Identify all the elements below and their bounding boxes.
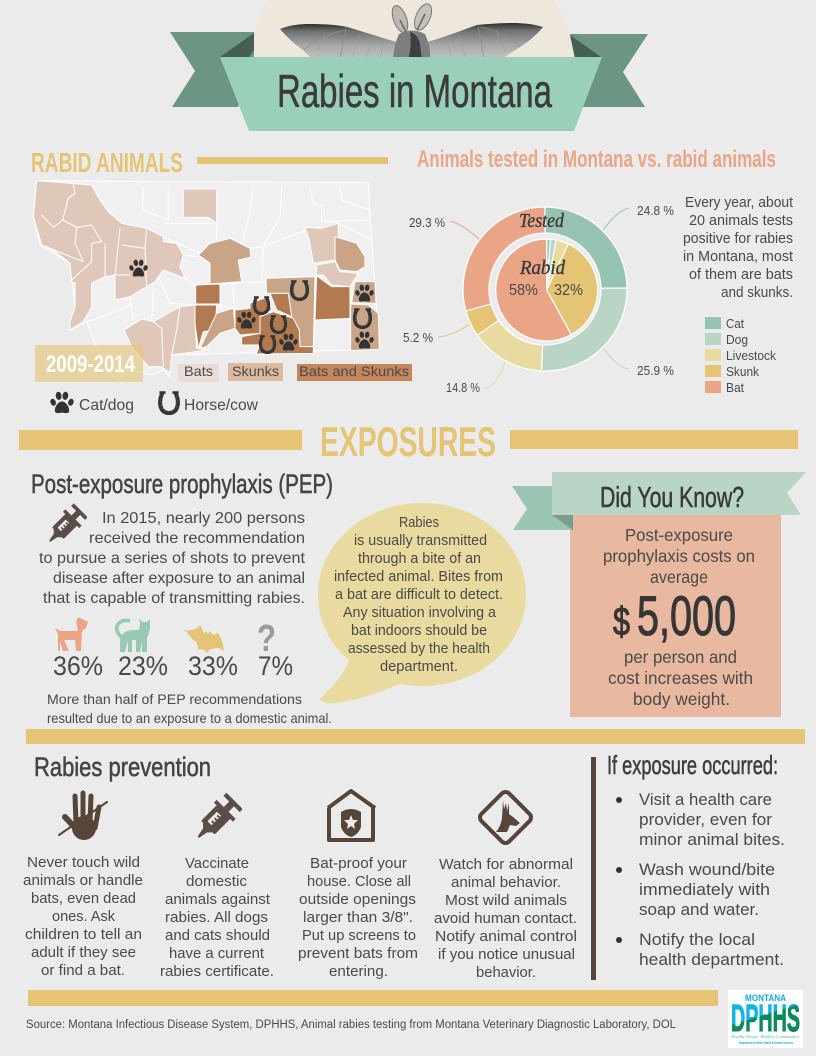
text: cost detail: cost increases with xyxy=(608,668,753,688)
text: domestic animal note: resulted due to an exposure to a domestic animal. xyxy=(47,710,332,726)
text: vaccinate: Vaccinate xyxy=(185,856,249,872)
icon: cat xyxy=(117,619,150,652)
text: every year: Every year, about xyxy=(685,195,793,211)
text: domestic animal note: More than half of PEP recommendations xyxy=(47,691,302,707)
year box xyxy=(35,345,143,382)
text: cost detail: per person and xyxy=(624,647,737,667)
icon: question mark: ? xyxy=(257,618,276,660)
list item: notify: Notify the local xyxy=(639,931,755,949)
chart legend: Livestock xyxy=(726,349,777,363)
text: watch for: Most wild animals xyxy=(445,893,567,909)
icon: bat xyxy=(280,1,543,60)
panel: animals tested vs rabid xyxy=(403,146,793,395)
text: bat-proof: outside openings xyxy=(299,892,416,908)
chart legend: Cat xyxy=(726,317,744,331)
text: vaccinate: rabies. All dogs xyxy=(165,910,268,926)
text: vaccinate: and cats should xyxy=(165,928,270,944)
callout: speech bubble: assessed by the health xyxy=(348,640,490,657)
text: vaccinate: have a current xyxy=(169,946,264,962)
text: never touch: ones. Ask xyxy=(52,909,116,925)
ribbon front xyxy=(220,57,602,131)
leader lines xyxy=(438,208,629,388)
ribbon left fold xyxy=(220,33,254,57)
logo: DPHHS: Department of Public Health & Human Services xyxy=(739,1041,793,1045)
number: cost: 5,000 xyxy=(637,584,736,647)
text: PEP description xyxy=(39,510,306,607)
panel: rabies prevention xyxy=(23,752,577,981)
icon: deer sign xyxy=(478,790,533,845)
icon: hand xyxy=(59,793,107,840)
chart legend: Bat xyxy=(726,381,745,395)
text: watch for: avoid human contact. xyxy=(434,911,577,927)
donut labels: 58% xyxy=(509,282,538,299)
text: cost intro xyxy=(603,525,755,587)
text: bat-proof: prevent bats from xyxy=(298,946,418,962)
section heading: exposures: EXPOSURES xyxy=(320,418,496,465)
text: every year: and skunks. xyxy=(721,285,793,301)
text: every year: positive for rabies xyxy=(683,231,793,247)
heading: Post-exposure prophylaxis (PEP) xyxy=(31,469,333,499)
logo: DPHHS: MONTANA xyxy=(745,993,786,1003)
legend: horse/cow xyxy=(159,392,258,414)
donut labels xyxy=(403,204,674,395)
callout: speech bubble: Rabies xyxy=(399,514,439,531)
donut labels: 25.9 % xyxy=(637,364,674,378)
section heading: exposures xyxy=(19,418,798,465)
text: bat-proof: Put up screens to xyxy=(302,928,416,944)
text: bat-proof: entering. xyxy=(329,964,388,980)
list item: visit xyxy=(616,791,785,849)
legend: cat/dog xyxy=(49,391,134,414)
map markers: cat/dog and horse/cow xyxy=(129,259,374,352)
heading: rabid animals: RABID ANIMALS xyxy=(31,147,183,178)
donut labels: 29.3 % xyxy=(409,216,445,230)
title: Rabies in Montana xyxy=(277,65,552,117)
legend: horse/cow: Horse/cow xyxy=(184,397,258,414)
percentages: 33% xyxy=(188,651,238,681)
legend: bats: Bats xyxy=(184,363,213,379)
text: watch for: if you notice unusual xyxy=(438,947,575,963)
legend: bats xyxy=(178,363,219,382)
icon: syringe xyxy=(189,791,244,847)
cost panel xyxy=(570,515,781,717)
text: PEP description: In 2015, nearly 200 persons xyxy=(102,510,305,527)
text: cost intro: prophylaxis costs on xyxy=(603,546,755,566)
legend: skunks: Skunks xyxy=(232,363,279,379)
text: PEP description: received the recommendation xyxy=(89,530,305,547)
text: PEP description: that is capable of transmitting rabies. xyxy=(43,590,305,607)
donut labels: 32% xyxy=(554,282,583,299)
text: vaccinate: rabies certificate. xyxy=(160,964,274,980)
percentages: 7% xyxy=(258,651,293,681)
logo: DPHHS xyxy=(728,990,803,1048)
number: cost: $ xyxy=(613,600,630,644)
donut labels: 24.8 % xyxy=(637,204,674,218)
text: PEP description: to pursue a series of shots to prevent xyxy=(39,550,306,567)
text: PEP description: disease after exposure to an animal xyxy=(53,570,305,587)
text: never touch: or find a bat. xyxy=(41,963,125,979)
divider bar xyxy=(26,729,805,744)
number: cost xyxy=(613,584,736,647)
chart: tested donut xyxy=(463,207,627,371)
chart: rabid pie xyxy=(496,239,598,341)
percentages: 23% xyxy=(118,651,168,681)
chart legend xyxy=(705,317,777,395)
icon: bat xyxy=(184,625,224,653)
panel: rabid animals map xyxy=(31,147,412,414)
donut labels: 5.2 % xyxy=(403,331,433,345)
ribbon front xyxy=(552,472,806,515)
text: watch for xyxy=(434,857,577,981)
chart legend: Dog xyxy=(726,333,748,347)
heading: Did You Know? xyxy=(600,482,744,514)
list item: visit: minor animal bites. xyxy=(639,831,785,849)
footer bar xyxy=(28,990,718,1006)
text: every year: of them are bats xyxy=(689,267,793,283)
text: bat-proof: Bat-proof your xyxy=(310,856,407,872)
list item: visit: Visit a health care xyxy=(639,791,772,809)
panel: if exposure occurred xyxy=(591,750,785,980)
map of Montana counties xyxy=(33,181,379,380)
text: watch for: behavior. xyxy=(476,965,536,981)
callout: speech bubble xyxy=(318,503,526,703)
list item: wash xyxy=(616,861,775,919)
callout: speech bubble: is usually transmitted xyxy=(354,532,487,549)
text: cost detail: body weight. xyxy=(633,689,730,709)
text: every year: in Montana, most xyxy=(683,249,793,265)
year label: 2009-2014 xyxy=(46,351,135,378)
text: bat-proof: house. Close all xyxy=(307,874,411,890)
percentages: 36% xyxy=(53,651,103,681)
list item: wash: soap and water. xyxy=(639,901,759,919)
ribbon fold xyxy=(552,515,573,530)
icon: syringe xyxy=(42,502,89,549)
text: domestic animal note xyxy=(47,691,332,726)
cream circle xyxy=(254,0,574,57)
ribbon back xyxy=(512,486,573,530)
donut labels: Tested xyxy=(519,210,565,232)
callout: speech bubble: Any situation involving a xyxy=(343,604,497,621)
legend: bats and skunks: Bats and Skunks xyxy=(299,363,409,379)
callout: speech bubble: department. xyxy=(380,658,458,675)
callout: speech bubble: a bat are difficult to detect. xyxy=(335,586,503,603)
callout: speech bubble: through a bite of an xyxy=(358,550,481,567)
chart legend: Skunk xyxy=(726,365,760,379)
source note: Source: Montana Infectious Disease System, DPHHS, Animal rabies testing from Montana Veterinary Diagnostic Laboratory, DOL xyxy=(26,1019,677,1031)
heading: Rabies prevention xyxy=(34,752,211,782)
text: bat-proof: larger than 3/8". xyxy=(303,910,413,926)
icon: shield house xyxy=(328,791,375,840)
callout: speech bubble: bat indoors should be xyxy=(351,622,487,639)
text: watch for: Notify animal control xyxy=(435,929,577,945)
text: never touch xyxy=(23,855,143,979)
legend: cat/dog: Cat/dog xyxy=(79,397,134,414)
text: never touch: animals or handle xyxy=(23,873,143,889)
text: cost intro: average xyxy=(650,567,708,587)
header banner xyxy=(170,0,648,131)
text: cost intro: Post-exposure xyxy=(625,525,733,545)
list item: visit: provider, even for xyxy=(639,811,773,829)
donut labels: 14.8 % xyxy=(446,381,480,395)
ribbon left tail xyxy=(170,32,254,107)
text: bat-proof xyxy=(298,856,418,980)
text: never touch: Never touch wild xyxy=(27,855,140,871)
list item: notify: health department. xyxy=(639,951,784,969)
donut labels: Rabid xyxy=(519,257,566,279)
text: watch for: animal behavior. xyxy=(451,875,561,891)
list item: notify xyxy=(616,931,784,969)
icon: dog xyxy=(55,617,88,651)
text: vaccinate xyxy=(160,856,274,980)
text: never touch: bats, even dead xyxy=(31,891,136,907)
list item: wash: immediately with xyxy=(639,881,770,899)
text: vaccinate: domestic xyxy=(186,874,247,890)
list item: wash: Wash wound/bite xyxy=(639,861,775,879)
text: every year: 20 animals tests xyxy=(689,213,793,229)
text: every year xyxy=(683,195,793,301)
panel: post-exposure prophylaxis xyxy=(31,469,333,726)
text: watch for: Watch for abnormal xyxy=(439,857,573,873)
text: cost detail xyxy=(608,647,753,709)
panel: did you know xyxy=(512,472,806,717)
text: never touch: adult if they see xyxy=(31,945,136,961)
ribbon right fold xyxy=(570,35,601,57)
text: vaccinate: animals against xyxy=(165,892,270,908)
text: never touch: children to tell an xyxy=(25,927,142,943)
ribbon right tail xyxy=(570,34,648,107)
logo: DPHHS: Healthy People. Healthy Communities. xyxy=(730,1034,800,1039)
percentages xyxy=(53,651,293,681)
callout: speech bubble: infected animal. Bites from xyxy=(334,568,503,585)
